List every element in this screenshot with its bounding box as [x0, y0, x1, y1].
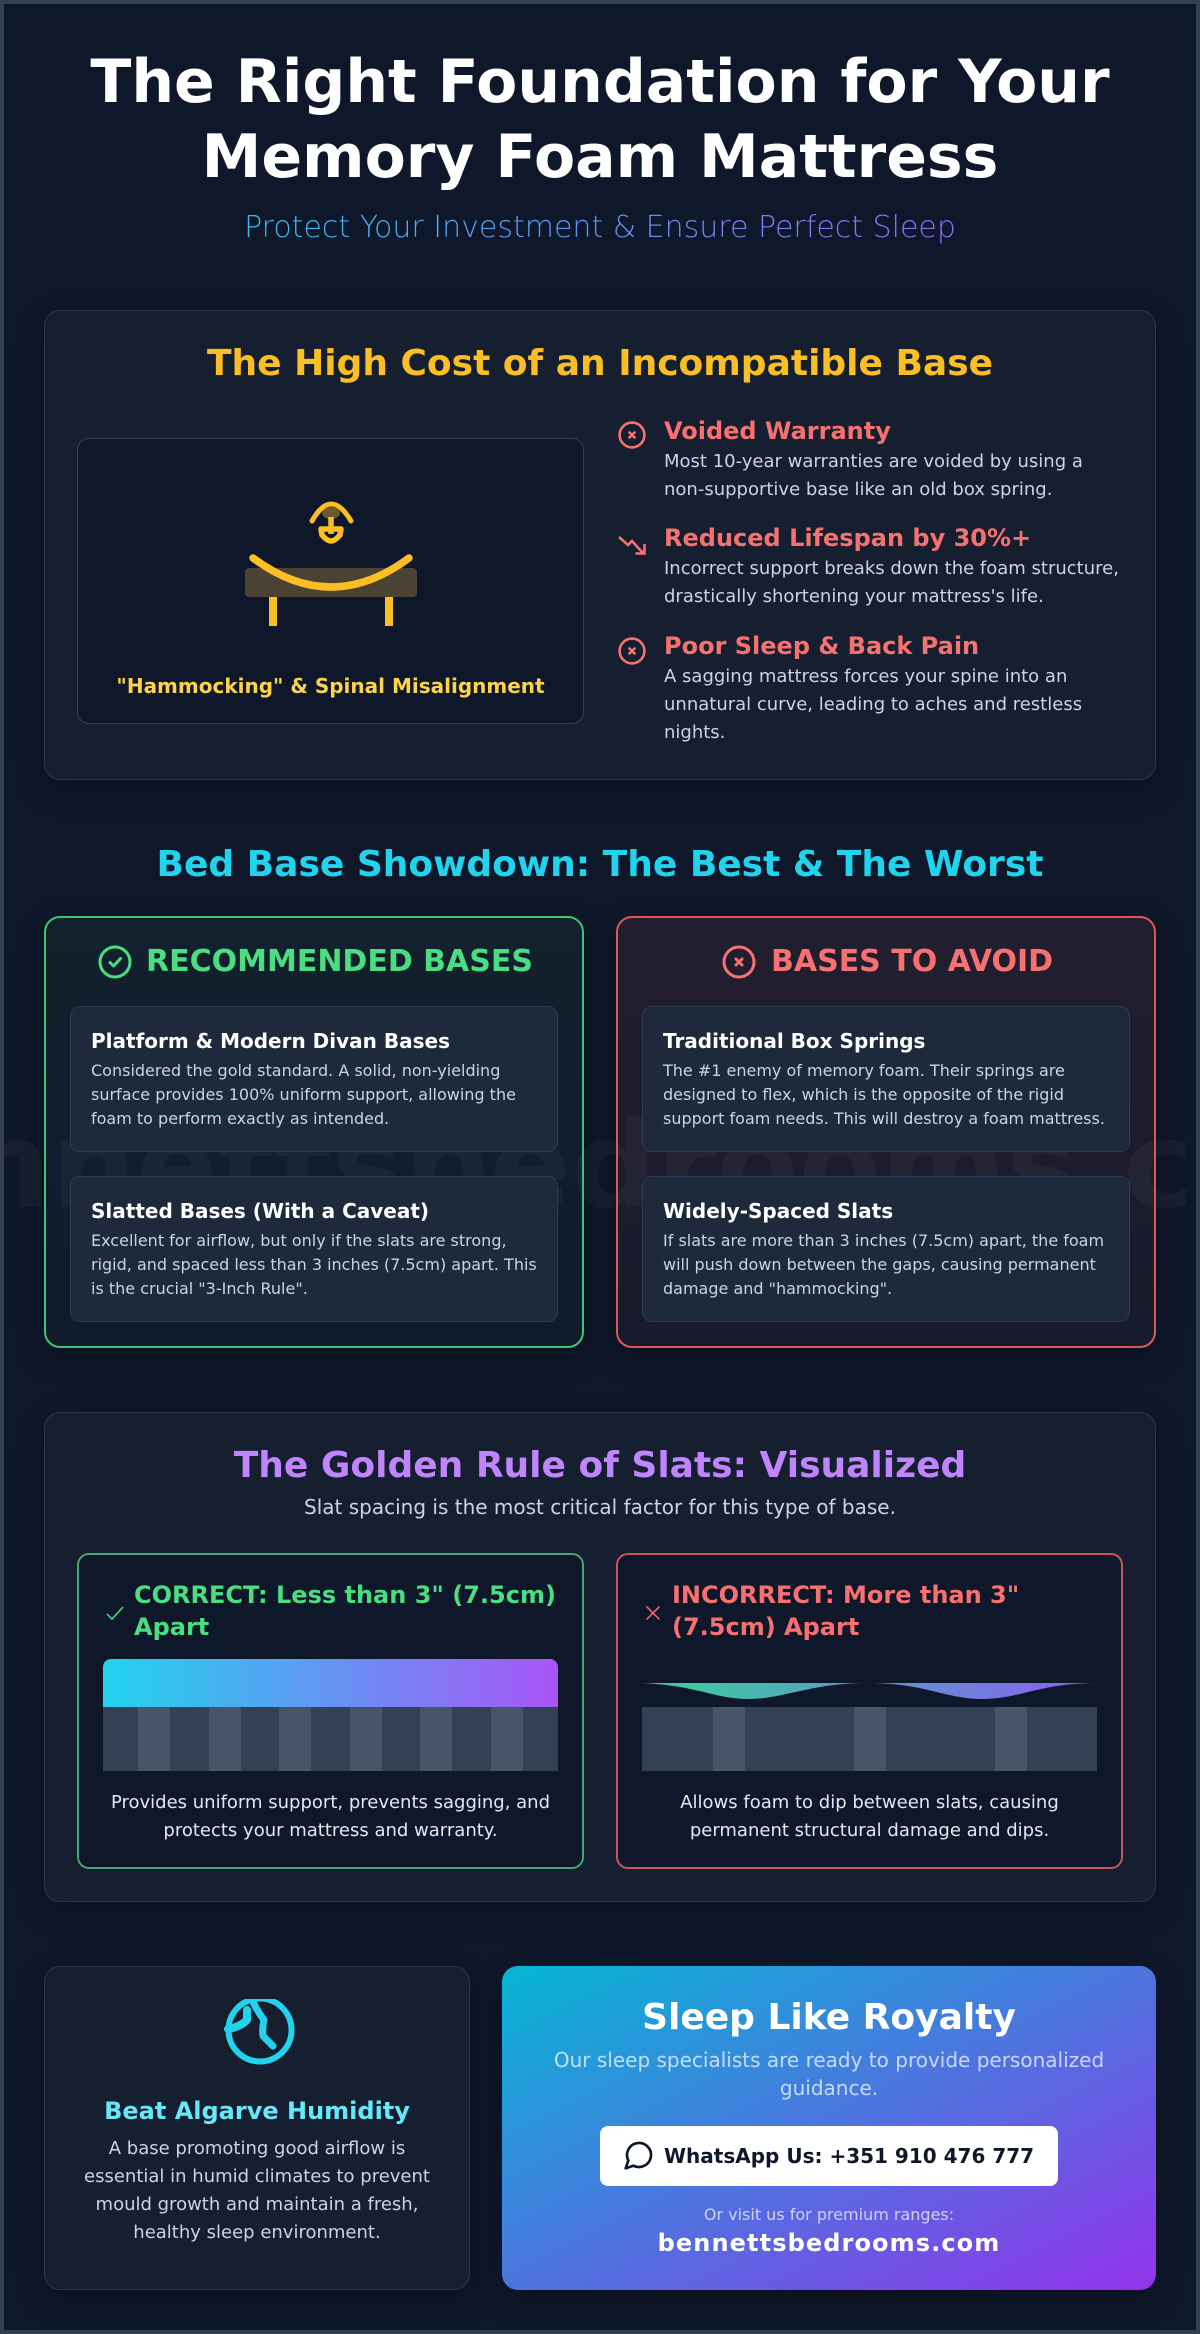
icon: x circle [618, 637, 646, 665]
text: whatsapp number: WhatsApp Us: +351 910 476 777 [664, 2144, 1034, 2168]
panel: correct spacing [77, 1553, 584, 1869]
text: website: bennettsbedrooms.com [658, 2229, 1000, 2257]
heading: incorrect [672, 1581, 1019, 1641]
panel: humidity [44, 1966, 470, 2290]
text: box springs: The #1 enemy of memory foam. Their springs are [663, 1061, 1065, 1080]
text: wide slats: If slats are more than 3 inches (7.5cm) apart, the foam [663, 1231, 1104, 1250]
heading: slatted: Slatted Bases (With a Caveat) [91, 1199, 429, 1223]
icon: x circle [722, 946, 756, 978]
text: slatted: is the crucial "3-Inch Rule". [91, 1279, 308, 1298]
item: voided warranty [618, 417, 1083, 500]
card: box springs [642, 1006, 1130, 1152]
text: slatted: Excellent for airflow, but only if the slats are strong, [91, 1231, 507, 1250]
text: correct caption [111, 1792, 550, 1841]
text: reduced lifespan [664, 558, 1119, 607]
panel: the high cost [44, 310, 1156, 780]
text: wide slats: damage and "hammocking". [663, 1279, 892, 1298]
heading: incorrect: INCORRECT: More than 3" [672, 1581, 1019, 1609]
slats [642, 1707, 1097, 1771]
text: correct caption: protects your mattress and warranty. [163, 1820, 498, 1841]
text: specialists: Our sleep specialists are ready to provide personalized [554, 2048, 1104, 2072]
text: specialists [554, 2048, 1104, 2100]
heading: golden rule: The Golden Rule of Slats: Visualized [234, 1445, 966, 1486]
panel: golden rule of slats [44, 1412, 1156, 1902]
text: incorrect caption [680, 1792, 1059, 1841]
text: platform: Considered the gold standard. A solid, non-yielding [91, 1061, 500, 1080]
icon: chat bubble [624, 2142, 652, 2170]
icon: check [106, 1606, 124, 1620]
heading: correct [134, 1581, 556, 1641]
text: humidity [84, 2138, 430, 2243]
text: poor sleep: unnatural curve, leading to aches and restless [664, 694, 1082, 715]
heading: box springs: Traditional Box Springs [663, 1029, 925, 1053]
item: reduced lifespan [618, 524, 1119, 607]
heading: high cost: The High Cost of an Incompatible Base [207, 343, 993, 384]
heading: wide slats: Widely-Spaced Slats [663, 1199, 893, 1223]
panel: incorrect spacing [616, 1553, 1123, 1869]
heading: platform: Platform & Modern Divan Bases [91, 1029, 450, 1053]
title: Memory Foam Mattress [202, 122, 998, 192]
text: humidity: A base promoting good airflow is [109, 2138, 405, 2159]
panel: bases to avoid [616, 916, 1156, 1348]
text: humidity: healthy sleep environment. [133, 2222, 381, 2243]
text: humidity: essential in humid climates to prevent [84, 2166, 430, 2187]
icon: airflow clock [224, 1999, 294, 2064]
item: poor sleep [618, 632, 1082, 743]
text: reduced lifespan: drastically shortening your mattress's life. [664, 586, 1044, 607]
heading: incorrect: (7.5cm) Apart [672, 1613, 859, 1641]
text: wide slats [663, 1231, 1104, 1298]
text: or visit: Or visit us for premium ranges: [704, 2205, 954, 2224]
text: specialists: guidance. [780, 2076, 878, 2100]
heading: showdown: Bed Base Showdown: The Best & The Worst [157, 844, 1043, 885]
heading: reduced lifespan: Reduced Lifespan by 30%+ [664, 524, 1031, 552]
text: poor sleep: nights. [664, 722, 725, 743]
text: incorrect caption: Allows foam to dip between slats, causing [680, 1792, 1059, 1813]
icon: check circle [98, 946, 132, 978]
card: platform bases [70, 1006, 558, 1152]
icon: cross [646, 1606, 660, 1620]
text: wide slats: will push down between the gaps, causing permanent [663, 1255, 1096, 1274]
text: poor sleep: A sagging mattress forces your spine into an [664, 666, 1067, 687]
text: golden rule subtitle: Slat spacing is the most critical factor for this type of base. [304, 1495, 896, 1519]
text: platform: surface provides 100% uniform support, allowing the [91, 1085, 516, 1104]
heading: humidity: Beat Algarve Humidity [104, 2097, 410, 2125]
subtitle [44, 210, 1156, 246]
heading: recommended: RECOMMENDED BASES [146, 944, 533, 979]
icon: trending down [618, 536, 646, 555]
panel: recommended bases [44, 916, 584, 1348]
text: voided warranty [664, 451, 1083, 500]
heading: poor sleep: Poor Sleep & Back Pain [664, 632, 979, 660]
slats [103, 1707, 558, 1771]
panel: hammocking diagram [77, 438, 584, 724]
text: incorrect caption: permanent structural damage and dips. [690, 1820, 1049, 1841]
text: voided warranty: Most 10-year warranties are voided by using a [664, 451, 1083, 472]
heading: avoid: BASES TO AVOID [771, 944, 1053, 979]
text: slatted: rigid, and spaced less than 3 inches (7.5cm) apart. This [91, 1255, 537, 1274]
title [90, 47, 1110, 192]
caption: hammocking: "Hammocking" & Spinal Misalignment [116, 674, 545, 698]
text: box springs: support foam needs. This will destroy a foam mattress. [663, 1109, 1105, 1128]
heading: voided warranty: Voided Warranty [664, 417, 891, 445]
text: humidity: mould growth and maintain a fresh, [96, 2194, 418, 2215]
heading: sleep like royalty: Sleep Like Royalty [642, 1997, 1016, 2038]
diagram: wide slats [642, 1683, 1097, 1771]
subtitle: Protect Your Investment & Ensure Perfect Sleep [244, 210, 956, 245]
diagram: close slats [103, 1659, 558, 1771]
heading: correct: Apart [134, 1613, 209, 1641]
button: whatsapp [600, 2126, 1058, 2186]
icon: x circle [618, 421, 646, 449]
card: slatted bases [70, 1176, 558, 1322]
panel: call to action [502, 1966, 1156, 2290]
text: box springs [662, 1061, 1105, 1128]
heading: correct: CORRECT: Less than 3" (7.5cm) [134, 1581, 556, 1609]
text: platform: foam to perform exactly as intended. [91, 1109, 389, 1128]
foam mattress [103, 1659, 558, 1707]
text: voided warranty: non-supportive base like an old box spring. [664, 479, 1052, 500]
text: correct caption: Provides uniform support, prevents sagging, and [111, 1792, 550, 1813]
text: box springs: designed to flex, which is the opposite of the rigid [663, 1085, 1064, 1104]
sagging foam [642, 1683, 1096, 1699]
icon: sagging bed and spine [245, 502, 417, 626]
text: reduced lifespan: Incorrect support breaks down the foam structure, [664, 558, 1119, 579]
text: slatted [91, 1231, 537, 1298]
title: The Right Foundation for Your [90, 47, 1110, 117]
text: poor sleep [664, 666, 1082, 743]
card: widely spaced slats [642, 1176, 1130, 1322]
text: platform [91, 1061, 516, 1128]
